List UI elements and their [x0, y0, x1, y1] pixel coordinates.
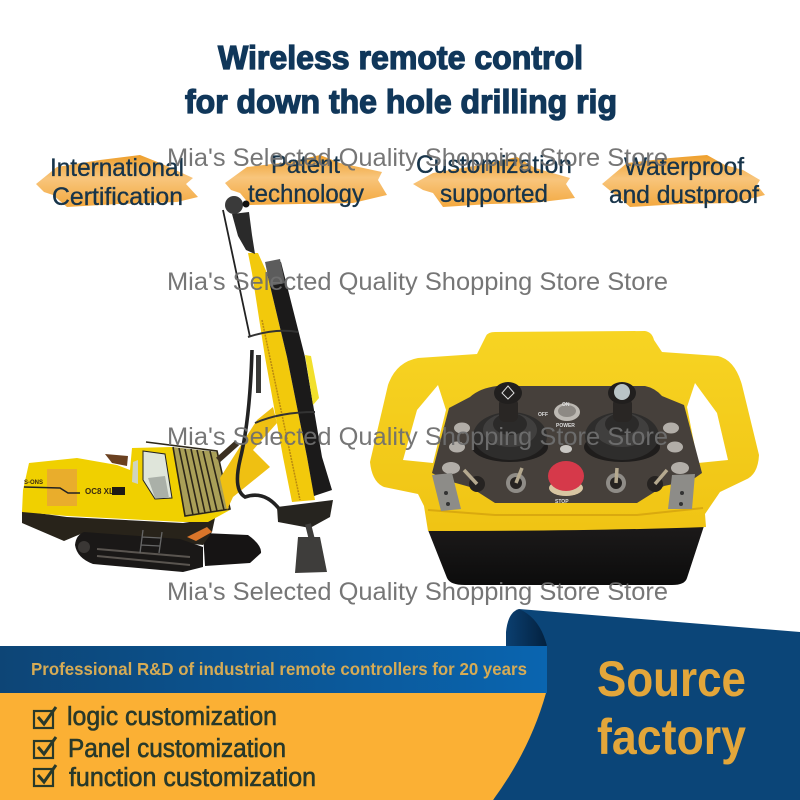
orange checklist panel: [0, 693, 546, 800]
store watermarks: Mia's Selected Quality Shopping Store Store: [167, 144, 668, 172]
feature badge: International Certification: Certification: [52, 183, 183, 211]
cab side window: [132, 460, 138, 484]
title: for down the hole drilling rig: [185, 83, 617, 120]
top cylinder: [265, 259, 285, 286]
brand plate: S-ONS: [24, 480, 43, 486]
source factory blue ribbon: [493, 609, 800, 800]
remote controller product: [370, 331, 759, 585]
feature badge: Patent technology: [225, 151, 387, 208]
boom arm: [220, 407, 277, 510]
feature badge: International Certification: [36, 154, 198, 211]
cab window: [143, 451, 172, 499]
hydraulic hoses: [237, 350, 280, 510]
mast rail yellow: [248, 253, 315, 502]
machine body: [22, 447, 230, 522]
boom cylinder: [218, 443, 237, 460]
store watermarks: Mia's Selected Quality Shopping Store Store: [167, 578, 668, 606]
power switch: [538, 402, 580, 429]
emergency stop button: STOP: [555, 499, 569, 505]
chassis underside: [22, 511, 215, 545]
radiator grille: [47, 469, 77, 506]
joystick right: [584, 382, 660, 462]
side yellow pad: [305, 355, 319, 405]
source factory text: factory: [597, 709, 746, 765]
signal lamp: [560, 445, 572, 453]
controller black base: [428, 526, 704, 585]
checklist item: logic customization: logic customization: [67, 703, 277, 731]
mast black cylinder: [267, 262, 332, 496]
store watermarks: [167, 144, 668, 606]
feature badge: Customization supported: supported: [440, 180, 548, 208]
store watermarks: Mia's Selected Quality Shopping Store Store: [167, 268, 668, 296]
ribbon curl: [506, 609, 547, 646]
left metal bracket: [432, 473, 461, 511]
drilling rig illustration: [22, 196, 333, 573]
source factory text: Source: [597, 651, 746, 707]
joystick left: [472, 382, 548, 462]
checklist item: function customization: function customization: [69, 764, 316, 792]
cab cage: [173, 447, 230, 517]
exhaust box: [105, 454, 128, 466]
blue headline band: Professional R&D of industrial remote controllers for 20 years: [31, 659, 527, 679]
store watermarks: Mia's Selected Quality Shopping Store Store: [167, 423, 668, 451]
housing shadow ledge: [428, 508, 703, 515]
orange hinge: [187, 527, 212, 541]
body model label: OC8 XL: [85, 487, 114, 496]
power switch: ON: [562, 402, 570, 408]
side push buttons: [442, 422, 689, 474]
feature badge: Patent technology: Patent: [271, 151, 340, 179]
source factory text: [597, 651, 746, 765]
feature badge: Waterproof and dustproof: Waterproof: [624, 153, 744, 181]
power switch: POWER: [556, 423, 575, 429]
rear crawler track: [203, 533, 261, 566]
handle opening left: [403, 385, 446, 463]
toggle switches: [464, 468, 667, 493]
mast head: [225, 196, 255, 254]
yellow housing: [370, 331, 759, 531]
emergency stop button: [548, 461, 584, 505]
right metal bracket: [668, 474, 695, 509]
control panel plate: [432, 386, 702, 503]
feature badge: Customization supported: Customization: [416, 151, 572, 179]
drill foot assembly: [277, 500, 333, 528]
power switch: OFF: [538, 412, 548, 418]
title: [185, 39, 617, 120]
checklist item: Panel customization: Panel customization: [68, 735, 286, 763]
feature badge: Customization supported: [413, 151, 575, 208]
handle opening right: [687, 383, 728, 463]
feature badge: Waterproof and dustproof: [602, 153, 765, 209]
ladder: [140, 530, 162, 553]
front crawler track: [75, 532, 203, 572]
feature badge: Patent technology: technology: [248, 180, 364, 208]
checklist: [34, 703, 316, 792]
blue headline band: [0, 646, 547, 693]
title: Wireless remote control: [218, 39, 583, 76]
feature badge: International Certification: International: [50, 154, 184, 182]
feature badge: Waterproof and dustproof: and dustproof: [609, 181, 759, 209]
